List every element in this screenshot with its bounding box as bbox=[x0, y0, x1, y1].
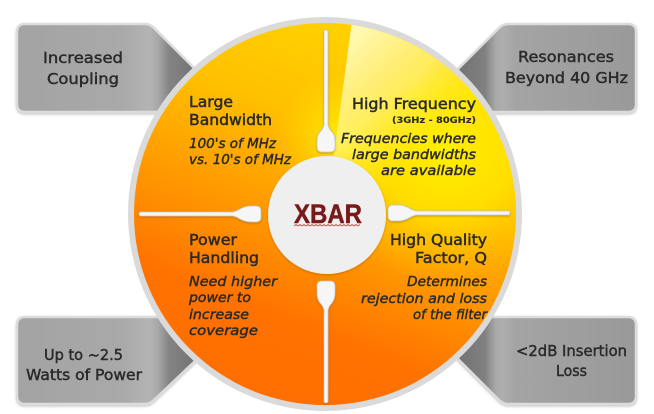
disc: gradient wheel bbox=[128, 17, 522, 411]
center hub: XBAR bbox=[268, 156, 386, 274]
text block: high frequency: are available bbox=[381, 164, 476, 179]
text block: large bandwidth: Bandwidth bbox=[189, 111, 272, 129]
callout: increased coupling: Coupling bbox=[47, 70, 119, 88]
text block: high quality factor bbox=[361, 231, 489, 323]
callout: insertion loss: Loss bbox=[556, 362, 587, 380]
text block: power handling: power to bbox=[188, 291, 251, 306]
text block: power handling: increase bbox=[189, 308, 249, 323]
text block: power handling: coverage bbox=[189, 324, 258, 339]
text block: power handling bbox=[188, 231, 279, 339]
callout: resonances beyond 40 GHz bbox=[440, 24, 636, 112]
text block: power handling: Need higher bbox=[189, 275, 279, 290]
spoke: right bbox=[388, 205, 510, 221]
text block: large bandwidth: Large bbox=[189, 93, 233, 111]
text block: high quality factor: of the filter bbox=[413, 308, 489, 323]
text block: high frequency bbox=[341, 95, 476, 179]
callout: up to 2.5 watts of power: Watts of Power bbox=[26, 366, 143, 384]
text block: high quality factor: High Quality bbox=[390, 231, 487, 249]
callout: increased coupling: Increased bbox=[43, 49, 123, 67]
text block: large bandwidth: 100's of MHz bbox=[189, 137, 277, 152]
text block: power handling: Power bbox=[189, 231, 238, 249]
text block: high frequency: Frequencies where bbox=[341, 132, 476, 147]
text block: high frequency: (3GHz - 80GHz) bbox=[392, 116, 476, 126]
callout: up to 2.5 watts of power: Up to ~2.5 bbox=[44, 346, 123, 364]
text block: high frequency: High Frequency bbox=[352, 95, 476, 113]
text block: high quality factor: Factor, Q bbox=[415, 249, 487, 267]
text block: high quality factor: Determines bbox=[407, 275, 487, 290]
text block: power handling: Handling bbox=[189, 249, 259, 267]
callout: insertion loss bbox=[440, 317, 636, 404]
text block: large bandwidth: vs. 10's of MHz bbox=[189, 153, 292, 168]
callout: increased coupling bbox=[17, 24, 215, 112]
spoke: left bbox=[139, 206, 261, 222]
text block: high quality factor: rejection and loss bbox=[361, 292, 487, 307]
callout: up to 2.5 watts of power bbox=[17, 317, 215, 404]
callout: resonances beyond 40 GHz: Resonances bbox=[518, 48, 614, 66]
spoke: bottom bbox=[317, 281, 335, 403]
callout: insertion loss: <2dB Insertion bbox=[516, 342, 627, 360]
text block: large bandwidth bbox=[189, 93, 292, 168]
text block: high frequency: large bandwidths bbox=[352, 148, 476, 163]
spoke: top bbox=[317, 30, 335, 152]
callout: resonances beyond 40 GHz: Beyond 40 GHz bbox=[505, 69, 628, 87]
center hub: XBAR: XBAR bbox=[294, 199, 362, 229]
